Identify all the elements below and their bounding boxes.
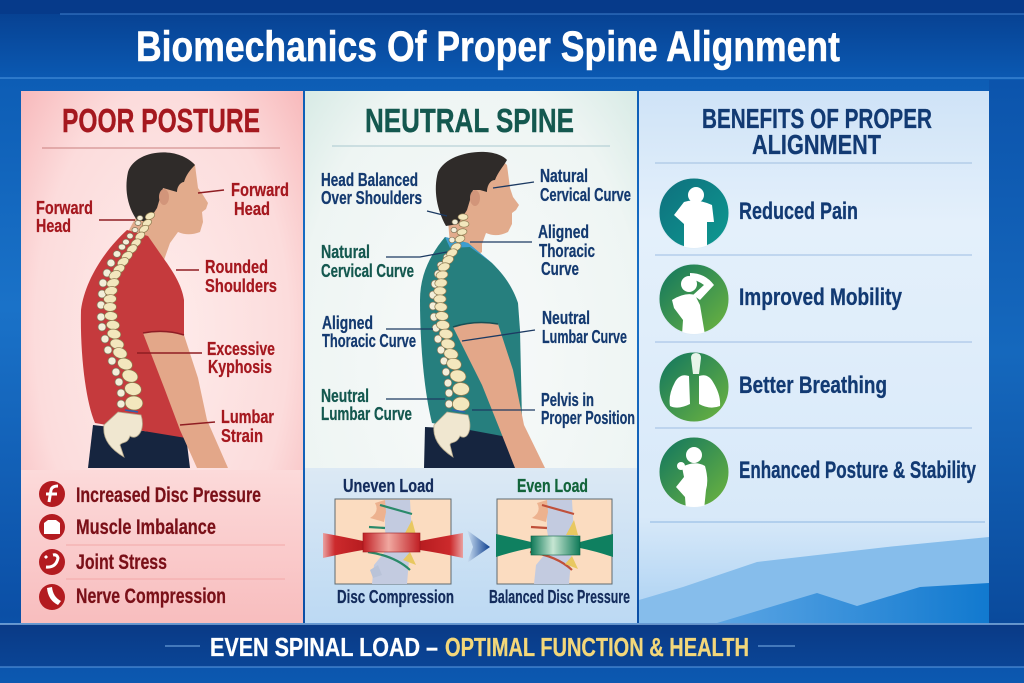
diagram: even load [496,499,613,584]
footer banner: OPTIMAL FUNCTION & HEALTH [445,632,749,662]
callout: forward head left [36,198,93,236]
callout: head balanced: Head Balanced [321,170,418,190]
callout: excessive kyphosis [207,339,275,377]
callout: lumbar strain: Lumbar [221,407,274,427]
arrow [467,530,490,563]
icon: muscle imbalance [39,514,65,540]
diagram: uneven load [323,499,463,584]
panel: benefits [639,91,989,623]
icon: improved mobility [659,264,729,335]
callout: forward head left: Forward [36,198,93,218]
callout: natural cervical curve left [321,242,414,281]
figure: upright man with spine [420,152,545,468]
uneven load label: Uneven Load [343,476,434,496]
callout: forward head right: Head [234,199,270,219]
footer banner [0,624,1024,667]
callout: neutral lumbar curve right [542,308,627,347]
callout: rounded shoulders [205,257,277,296]
benefit: reduced pain: Reduced Pain [739,198,858,225]
effect: increased disc pressure: Increased Disc Pressure [76,484,261,507]
icon: nerve compression [39,584,65,610]
callout: excessive kyphosis: Excessive [207,339,275,359]
callout: forward head right [231,180,289,219]
icon: joint stress [39,549,65,575]
panel: neutral spine [305,91,637,623]
callout: head balanced [321,170,422,208]
benefits heading: BENEFITS OF PROPER [702,103,932,134]
icon: disc pressure [39,481,65,507]
benefit: better breathing: Better Breathing [739,372,887,399]
benefit: improved mobility: Improved Mobility [739,284,903,311]
callout: pelvis in proper position: Proper Position [541,408,635,428]
neutral spine heading: NEUTRAL SPINE [365,102,574,139]
callout: neutral lumbar curve left: Neutral [321,386,369,406]
callout: aligned thoracic curve right: Curve [541,259,579,279]
callout: excessive kyphosis: Kyphosis [208,357,272,377]
disc compression label: Disc Compression [337,587,454,607]
poor posture heading: POOR POSTURE [62,102,260,139]
callout lines [386,182,535,410]
callout: aligned thoracic curve right [538,222,595,279]
callout: forward head left: Head [36,216,71,236]
icon: better breathing [659,352,729,422]
callout: rounded shoulders: Shoulders [205,276,277,296]
callout: natural cervical curve right: Cervical Curve [540,185,631,205]
callout: head balanced: Over Shoulders [321,188,422,208]
benefits heading: ALIGNMENT [752,129,881,160]
callout: aligned thoracic curve left: Aligned [322,313,373,333]
callout: neutral lumbar curve right: Neutral [542,308,590,328]
callout: forward head right: Forward [231,180,289,200]
panel: poor posture [21,91,303,623]
callout: rounded shoulders: Rounded [205,257,268,277]
load comparison section [305,468,637,623]
callout: neutral lumbar curve right: Lumbar Curve [542,327,627,347]
callout: natural cervical curve right: Natural [540,166,588,186]
callout: lumbar strain: Strain [221,426,263,446]
effect: joint stress: Joint Stress [76,551,167,574]
callout: natural cervical curve left: Natural [321,242,370,262]
callout: pelvis in proper position [541,390,635,428]
callout: aligned thoracic curve right: Aligned [538,222,589,242]
benefits heading [702,103,932,160]
balanced disc pressure label: Balanced Disc Pressure [489,587,630,607]
callout: natural cervical curve right [540,166,631,205]
callout: neutral lumbar curve left [321,386,412,424]
footer banner: EVEN SPINAL LOAD – [210,632,438,662]
figure: slouched man with spine [81,152,228,468]
callout: pelvis in proper position: Pelvis in [541,390,594,410]
even load label: Even Load [517,476,588,496]
callout: natural cervical curve left: Cervical Curve [321,261,414,281]
effect: nerve compression: Nerve Compression [76,585,226,608]
icon: posture and stability [659,437,729,510]
icon: reduced pain [659,178,729,250]
callout: aligned thoracic curve left: Thoracic Curve [322,331,416,351]
callout: neutral lumbar curve left: Lumbar Curve [321,404,412,424]
callout lines [99,190,224,425]
effect: muscle imbalance: Muscle Imbalance [76,516,216,539]
callout: lumbar strain [221,407,274,446]
callout: aligned thoracic curve left [322,313,416,351]
poor posture effects list [21,470,303,623]
callout: aligned thoracic curve right: Thoracic [539,241,595,261]
title: Biomechanics Of Proper Spine Alignment [136,23,840,71]
